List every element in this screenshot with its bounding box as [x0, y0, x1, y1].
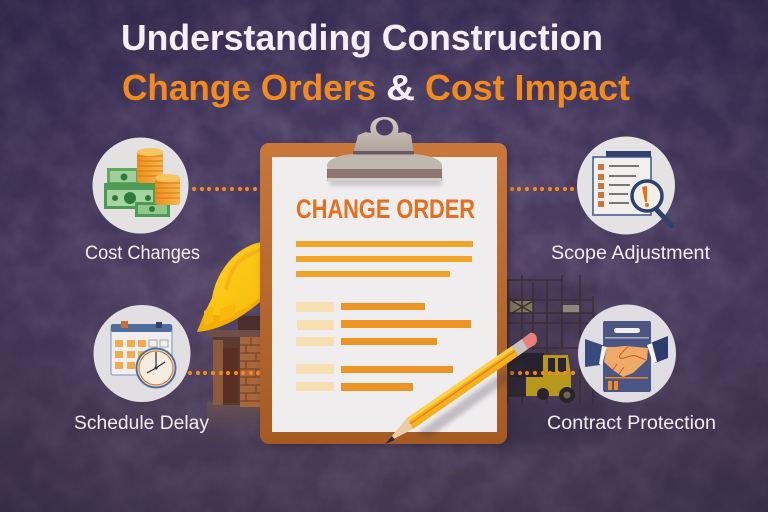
change order heading: CHANGE ORDER: [296, 194, 475, 224]
pencil: [385, 333, 537, 444]
title line 2: [122, 67, 630, 108]
dotted connectors: [188, 187, 575, 375]
scaffolding and truck: [506, 275, 606, 444]
brick building: [207, 316, 264, 438]
connector: schedule delay: [188, 371, 260, 375]
icon: circle background: [577, 136, 675, 234]
clipboard board: [260, 143, 507, 444]
table rows: [296, 302, 471, 391]
icon: money and coins: [104, 148, 180, 217]
panel: scope adjustment: [551, 136, 711, 264]
connector: cost changes: [192, 187, 257, 191]
icon: circle background: [578, 304, 676, 402]
label: Schedule Delay: [74, 413, 209, 434]
title line 2: Change Orders: [122, 67, 376, 108]
connector: scope adjustment: [510, 187, 574, 191]
label: Contract Protection: [547, 413, 716, 434]
label: Cost Changes: [85, 243, 200, 264]
title line 1: Understanding Construction: [121, 17, 603, 58]
icon: checklist with magnifier: [593, 151, 672, 226]
label: Scope Adjustment: [551, 243, 711, 264]
icon: handshake on contract: [585, 321, 668, 392]
icon: circle background: [94, 305, 190, 402]
hard hat: [197, 242, 262, 332]
title: [121, 17, 630, 108]
icon: calendar and clock: [111, 321, 176, 388]
connector: contract protection: [510, 371, 575, 375]
panel: contract protection: [547, 304, 716, 434]
clip: [327, 117, 442, 186]
title line 2: Cost Impact: [425, 67, 630, 108]
title line 2: &: [386, 67, 415, 108]
text lines: [296, 241, 473, 277]
icon: circle background: [92, 138, 188, 234]
truck: [508, 353, 575, 403]
panel: schedule delay: [74, 305, 209, 434]
panel: cost changes: [85, 138, 200, 264]
clipboard: [260, 117, 537, 448]
paper: [272, 157, 497, 432]
